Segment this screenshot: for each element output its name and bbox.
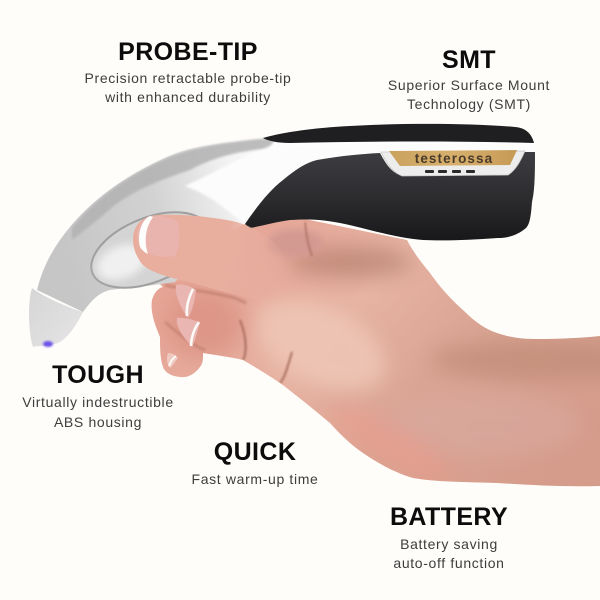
- label: SMT: Technology (SMT): [407, 96, 531, 112]
- translucent tip: [29, 288, 83, 347]
- label: probe-tip: PROBE-TIP: [118, 38, 258, 66]
- hand: [133, 214, 600, 496]
- label: probe-tip: Precision retractable probe-tip: [85, 70, 291, 86]
- label: battery: Battery saving: [400, 536, 498, 552]
- thumb: [133, 215, 285, 305]
- label: SMT: [388, 46, 550, 112]
- label: probe-tip: with enhanced durability: [104, 89, 271, 105]
- thumbnail: [137, 216, 179, 257]
- label: tough: ABS housing: [54, 414, 142, 430]
- black top band: [263, 124, 534, 143]
- label: battery: auto-off function: [393, 555, 505, 571]
- label: battery: [390, 503, 508, 571]
- gold badge: [381, 150, 525, 176]
- label: battery: BATTERY: [390, 503, 508, 531]
- label: tough: Virtually indestructible: [22, 394, 174, 410]
- label: SMT: Superior Surface Mount: [388, 77, 550, 93]
- gold badge: testerossa: [415, 151, 493, 166]
- label: quick: QUICK: [214, 438, 296, 466]
- label: SMT: SMT: [442, 46, 496, 74]
- grey top shade: [72, 138, 273, 240]
- label: quick: [192, 438, 318, 487]
- label: tough: TOUGH: [52, 361, 144, 389]
- thumb button: [81, 197, 219, 303]
- label: probe-tip: [85, 38, 291, 105]
- label: quick: Fast warm-up time: [192, 471, 318, 487]
- probe device: [29, 124, 535, 347]
- black grip: [245, 152, 535, 240]
- finger nails: [167, 284, 200, 368]
- white highlight: [185, 143, 534, 224]
- label: tough: [22, 361, 174, 430]
- silver body: [37, 138, 534, 312]
